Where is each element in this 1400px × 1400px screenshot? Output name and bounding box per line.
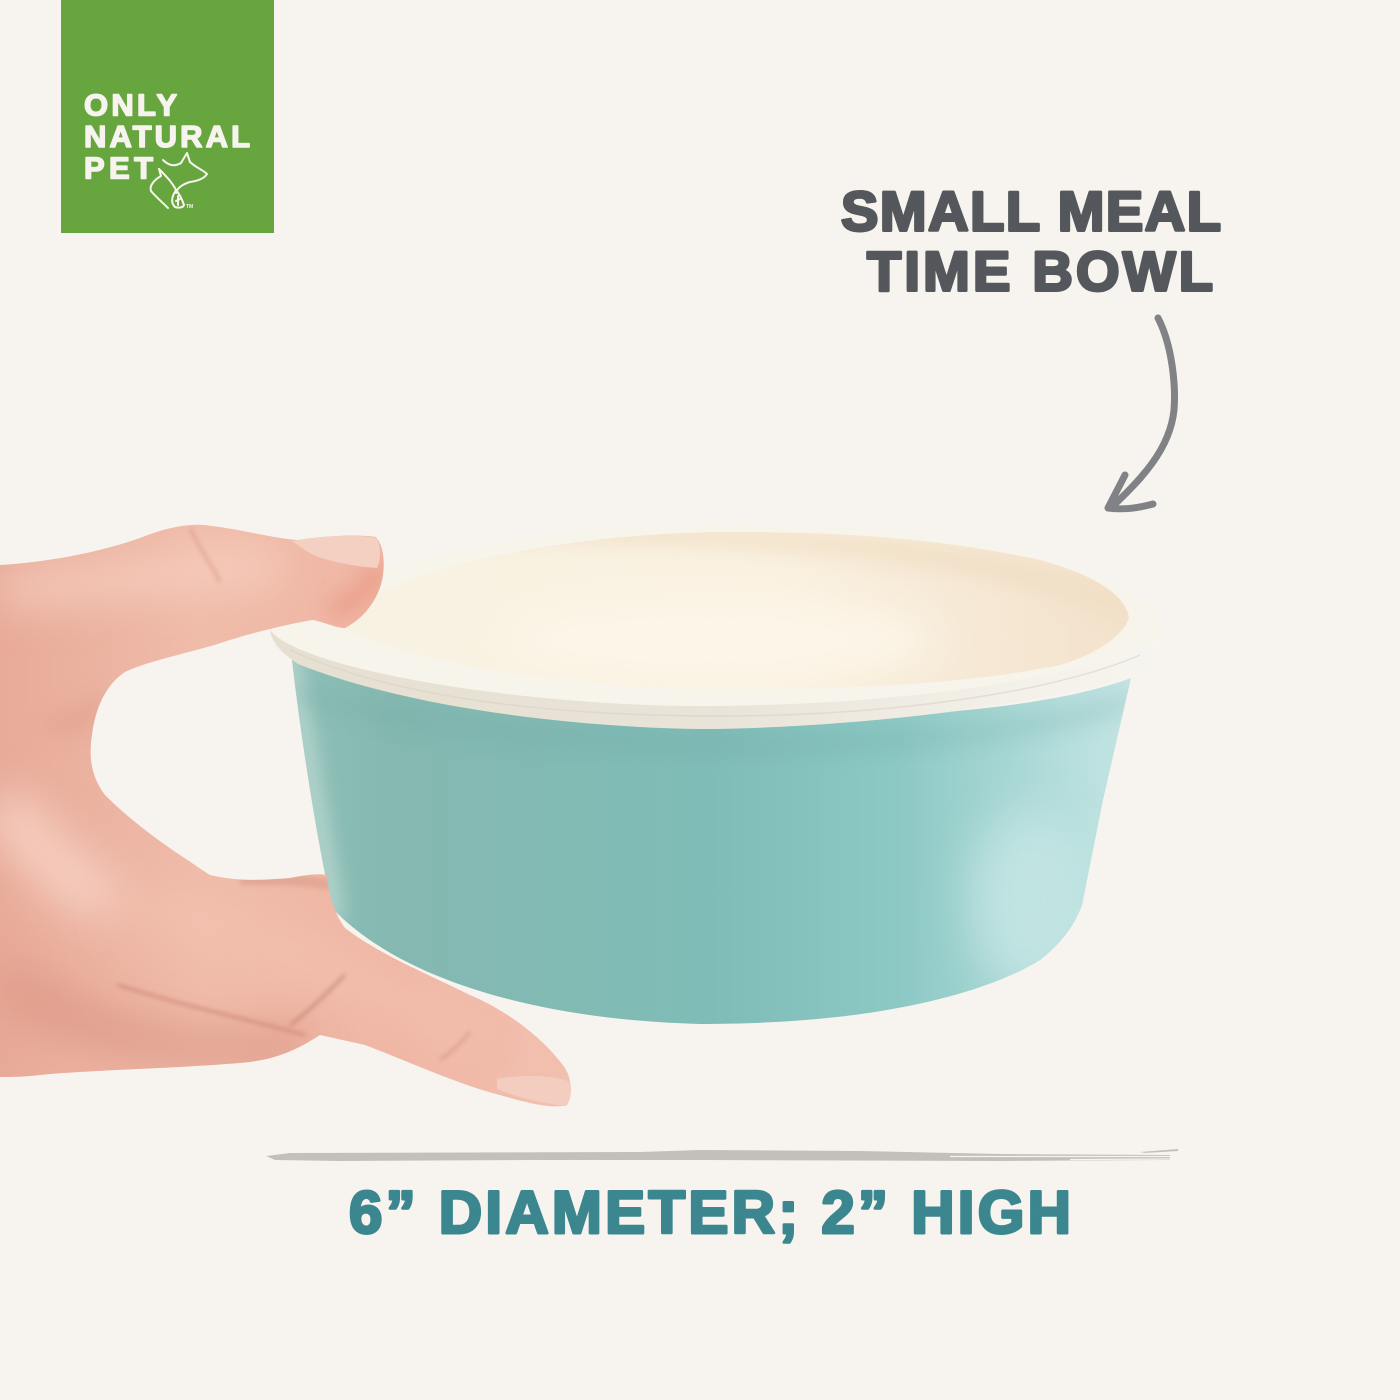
bowl body shading bbox=[288, 650, 1131, 990]
logo: Only Natural Pet bbox=[61, 0, 274, 233]
logo: Only Natural Pet: TM bbox=[186, 204, 193, 210]
arrow pointing to the bowl bbox=[1108, 318, 1174, 509]
thumb nail bbox=[292, 536, 380, 568]
callout: small meal time bowl: TIME BOWL bbox=[867, 240, 1213, 302]
logo: Only Natural Pet: NATURAL bbox=[84, 119, 250, 154]
callout: small meal time bowl bbox=[841, 180, 1221, 302]
hand shading bbox=[0, 528, 470, 1060]
bowl bbox=[270, 524, 1165, 1024]
bowl interior shading bbox=[554, 532, 1084, 666]
bowl outer body bbox=[292, 660, 1131, 1024]
logo: Only Natural Pet: ONLY bbox=[84, 88, 177, 122]
bowl rim top bbox=[270, 524, 1165, 706]
bowl interior bbox=[335, 532, 1129, 689]
hand silhouette bbox=[0, 525, 571, 1106]
icon: dog, cat and leaf bbox=[151, 153, 207, 208]
logo: Only Natural Pet: PET bbox=[84, 150, 153, 186]
dimensions label: 6” DIAMETER; 2” HIGH bbox=[349, 1179, 1071, 1246]
bowl rim detail line bbox=[290, 650, 1140, 716]
infographic canvas bbox=[0, 0, 1221, 1244]
finger nail bbox=[497, 1076, 571, 1106]
bowl rim underside bbox=[270, 524, 1165, 729]
hand holding the bowl bbox=[0, 525, 571, 1106]
brush stroke divider bbox=[266, 1149, 1178, 1161]
callout: small meal time bowl: SMALL MEAL bbox=[841, 180, 1221, 242]
